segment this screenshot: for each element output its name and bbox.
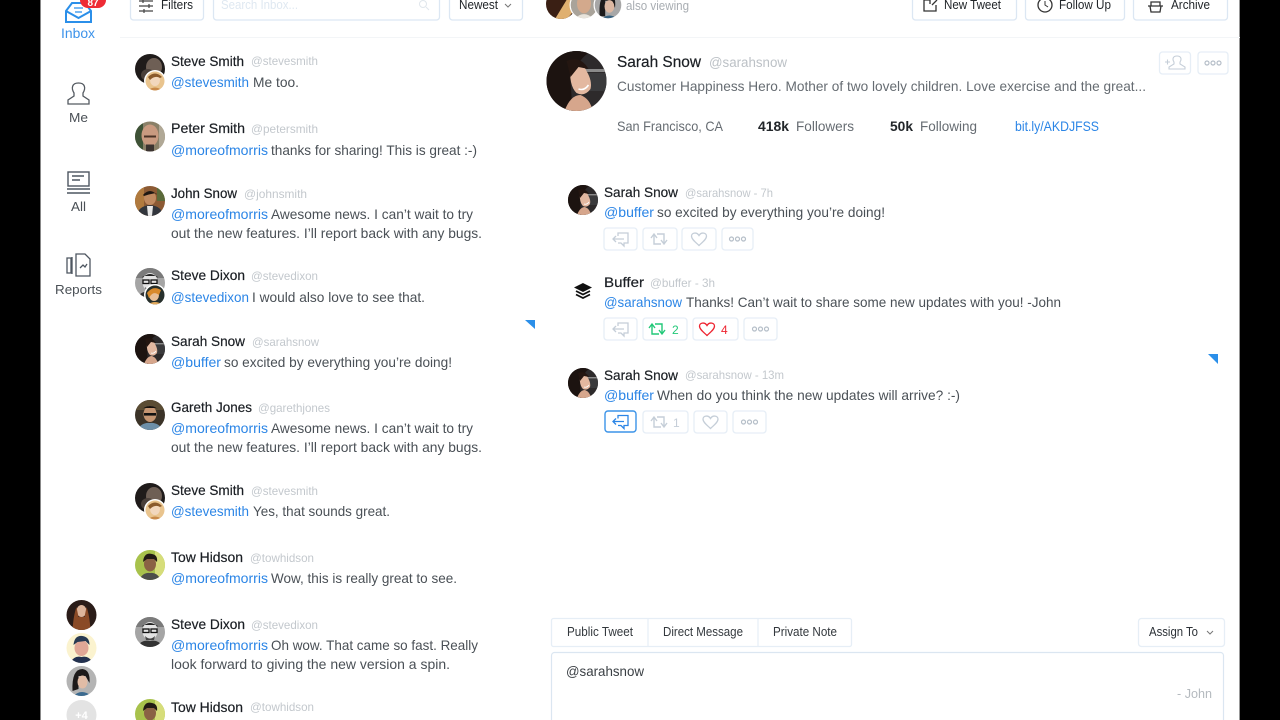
profile header: [546, 51, 1228, 134]
item: Gareth Jones: [135, 399, 482, 455]
item: Steve Smith 2: Steve Smith: [171, 482, 244, 498]
composer tabs: [552, 618, 852, 646]
reply text box: @sarahsnow: [566, 663, 645, 679]
toolbar: conversation: [546, 0, 1228, 20]
profile stats: San Francisco, CA: [617, 118, 724, 134]
icon: me: [68, 83, 89, 104]
more avatars: [66, 700, 96, 720]
item: John Snow: [135, 185, 482, 241]
item: Steve Smith 2: [135, 482, 390, 521]
button: new tweet: [912, 0, 1016, 20]
item: Peter Smith: Peter Smith: [171, 120, 245, 136]
item: Sarah Snow: [135, 333, 452, 370]
item: Sarah Snow: @buffer: [171, 354, 221, 370]
tweet 3: When do you think the new updates will arrive? :-): [657, 387, 960, 403]
search field: [214, 0, 440, 20]
button: follow up: [1026, 0, 1124, 20]
item: Tow Hidson: @towhidson: [250, 551, 314, 565]
nav label: Inbox: Inbox: [61, 25, 95, 41]
item: Gareth Jones: @moreofmorris: [171, 420, 268, 436]
tweet 1: Sarah Snow: [604, 184, 679, 200]
item: Steve Smith 2: @stevesmith: [251, 484, 318, 498]
item: Gareth Jones: out the new features. I’ll report back with any bugs.: [171, 439, 482, 455]
dropdown: newest: [450, 0, 522, 20]
item: John Snow: @johnsmith: [244, 187, 307, 201]
icon: inbox: [66, 3, 91, 22]
composer tabs: Public Tweet: [567, 625, 633, 639]
item: Steve Smith: @stevesmith: [171, 74, 249, 90]
tweet 1: [568, 184, 885, 250]
item: John Snow: out the new features. I’ll report back with any bugs.: [171, 225, 482, 241]
profile stats: [617, 118, 1099, 134]
item: John Snow: John Snow: [171, 185, 238, 201]
nav label: All: All: [71, 199, 86, 214]
dropdown: assign to: Assign To: [1149, 625, 1198, 639]
tweet 2: @sarahsnow: [604, 294, 683, 310]
item: Steve Dixon: @stevedixon: [171, 289, 249, 305]
profile name: Sarah Snow: [617, 54, 702, 71]
item: Steve Dixon 2: @stevedixon: [251, 618, 318, 632]
reply text box: [552, 652, 1224, 720]
item: Steve Dixon: I would also love to see that.: [252, 289, 425, 305]
profile stats: Followers: [796, 118, 854, 134]
profile stats: Following: [920, 118, 977, 134]
tweet 1: @sarahsnow - 7h: [685, 186, 773, 200]
item: John Snow: @moreofmorris: [171, 206, 268, 222]
button: more: [1198, 52, 1228, 74]
button: filters: [130, 0, 204, 20]
tweet 2: @buffer - 3h: [650, 276, 715, 290]
item: Tow Hidson: @moreofmorris: [171, 570, 268, 586]
item: Steve Dixon 2: Oh wow. That came so fast. Really: [271, 637, 478, 653]
item: Steve Smith 2: @stevesmith: [171, 503, 249, 519]
dropdown: assign to: [1138, 618, 1224, 646]
item: Steve Smith: Steve Smith: [171, 53, 244, 69]
item: Peter Smith: @petersmith: [251, 122, 318, 136]
item: Tow Hidson: Tow Hidson: [171, 549, 243, 565]
item: Steve Dixon: [135, 267, 425, 306]
composer tabs: Direct Message: [663, 625, 743, 639]
item: Steve Smith 2: Yes, that sounds great.: [253, 503, 390, 519]
item: Peter Smith: [135, 120, 477, 158]
button: archive: [1134, 0, 1228, 20]
icon: buffer logo: [576, 284, 590, 298]
tweet 3: @buffer: [604, 387, 654, 403]
conversation list: [135, 53, 535, 720]
item: Gareth Jones: Gareth Jones: [171, 399, 252, 415]
item: Sarah Snow: Sarah Snow: [171, 333, 246, 349]
item: Steve Dixon: Steve Dixon: [171, 267, 245, 283]
composer: [552, 618, 1224, 720]
item: Gareth Jones: Awesome news. I can’t wait to try: [271, 420, 473, 436]
toolbar: inbox: [130, 0, 522, 20]
profile handle: @sarahsnow: [709, 55, 787, 70]
sidebar navigation: [55, 0, 106, 720]
team avatar 3: [66, 666, 96, 696]
tweet thread: [568, 184, 1218, 433]
item: John Snow: Awesome news. I can’t wait to try: [271, 206, 473, 222]
tweet 2: Thanks! Can’t wait to share some new updates with you! -John: [686, 294, 1061, 310]
item: Tow Hidson 2: [135, 699, 314, 720]
composer tabs: Private Note: [773, 625, 837, 639]
item: Tow Hidson: Wow, this is really great to see.: [271, 570, 457, 586]
tweet 3: Sarah Snow: [604, 367, 679, 383]
reply text box: - John: [1177, 686, 1212, 701]
badge: unread count: [80, 0, 106, 9]
item: Steve Dixon 2: look forward to giving the new version a spin.: [171, 656, 450, 672]
nav label: Reports: Reports: [55, 282, 103, 297]
item: Sarah Snow: @sarahsnow: [252, 335, 319, 349]
profile stats: 418k: [758, 118, 789, 134]
marker: unread corner: [525, 320, 535, 329]
tweet 2: [576, 274, 1061, 340]
item: Tow Hidson 2: Tow Hidson: [171, 699, 243, 715]
profile stats: bit.ly/AKDJFSS: [1015, 118, 1099, 134]
item: Steve Smith: Me too.: [253, 74, 299, 90]
item: Steve Dixon 2: @moreofmorris: [171, 637, 268, 653]
profile stats: 50k: [890, 118, 913, 134]
tweet 2 actions: [604, 318, 777, 340]
team avatar 1: [66, 600, 96, 630]
tweet 2 actions: 2: [672, 323, 679, 337]
tweet 3: @sarahsnow - 13m: [685, 368, 784, 382]
item: Tow Hidson: [135, 549, 457, 586]
also viewing avatars: [546, 0, 622, 20]
tweet 3 actions: 1: [673, 416, 680, 430]
item: Steve Smith: [135, 53, 318, 92]
tweet 1 actions: [604, 228, 753, 250]
item: Peter Smith: @moreofmorris: [171, 142, 268, 158]
item: Peter Smith: thanks for sharing! This is great :-): [271, 142, 477, 158]
marker: unread corner: [1208, 354, 1218, 364]
team avatar 2: [66, 633, 96, 663]
tweet 1: so excited by everything you’re doing!: [657, 204, 885, 220]
icon: all: [67, 172, 90, 193]
nav label: Me: Me: [69, 110, 88, 125]
tweet 3 actions: [605, 411, 766, 433]
item: Steve Dixon 2: [135, 616, 478, 672]
item: Gareth Jones: @garethjones: [258, 401, 330, 415]
button: follow: [1160, 52, 1190, 74]
profile avatar: [546, 51, 606, 111]
profile bio: Customer Happiness Hero. Mother of two lovely children. Love exercise and the great...: [617, 78, 1146, 94]
tweet 3: [568, 367, 960, 433]
tweet 2: Buffer: [604, 274, 644, 290]
item: Tow Hidson 2: @towhidson: [250, 700, 314, 714]
item: Steve Dixon: @stevedixon: [251, 269, 318, 283]
tweet 2 actions: 4: [721, 323, 728, 337]
item: Steve Dixon 2: Steve Dixon: [171, 616, 245, 632]
tweet 1: @buffer: [604, 204, 654, 220]
item: Sarah Snow: so excited by everything you’re doing!: [224, 354, 452, 370]
icon: reports: [67, 254, 90, 276]
item: Steve Smith: @stevesmith: [251, 54, 318, 68]
